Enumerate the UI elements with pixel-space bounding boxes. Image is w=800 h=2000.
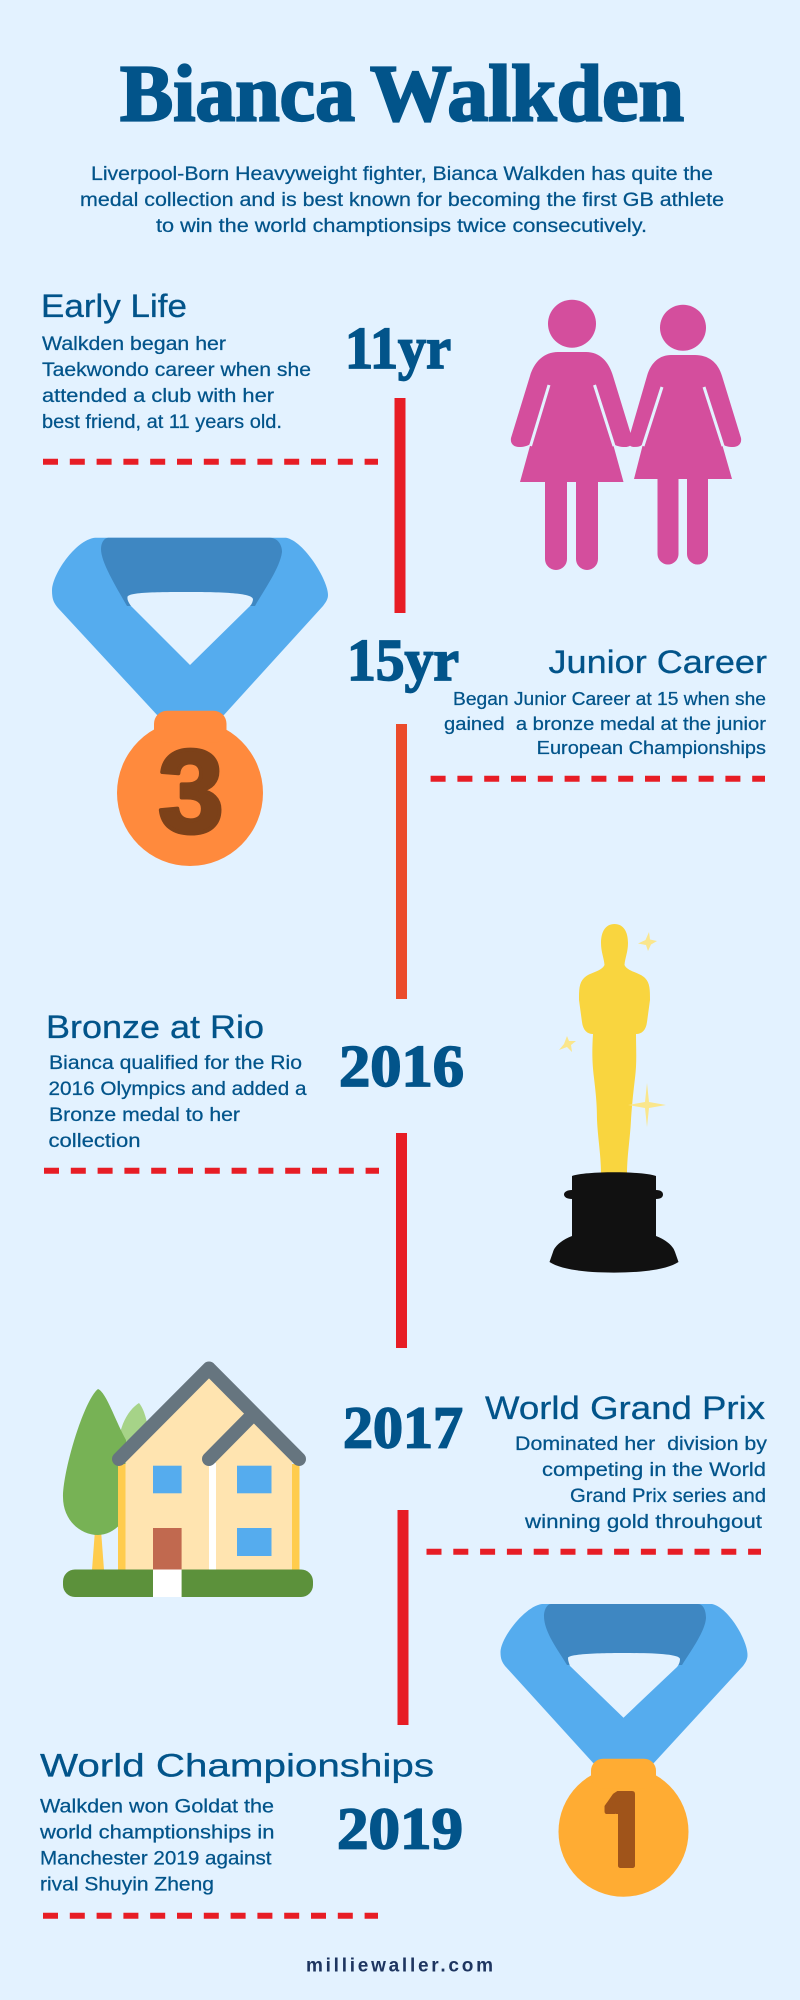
heading: bronze at rio: Bronze at Rio bbox=[46, 1009, 264, 1045]
title: Bianca bbox=[120, 51, 355, 139]
text block: early life: Taekwondo career when she bbox=[42, 359, 311, 381]
intro text block: medal collection and is best known for becoming the first GB athlete bbox=[80, 189, 724, 211]
door bbox=[153, 1528, 182, 1570]
timeline segment 3 bbox=[396, 1133, 407, 1348]
medal disc bbox=[117, 720, 263, 866]
text block: junior career: Began Junior Career at 15 when she bbox=[453, 689, 766, 709]
text block: world grand prix bbox=[515, 1433, 767, 1533]
house walls bbox=[126, 1370, 292, 1570]
text block: early life: attended a club with her bbox=[42, 385, 275, 407]
icon: bronze medal bbox=[52, 538, 328, 866]
panel: world grand prix bbox=[426, 1390, 767, 1552]
medal number: 1 bbox=[594, 1770, 655, 1891]
intro text block: to win the world champtionsips twice consecutively. bbox=[156, 215, 647, 237]
text block: early life: Walkden began her bbox=[42, 333, 227, 355]
panel: junior career bbox=[431, 644, 767, 779]
intro text block: Liverpool-Born Heavyweight fighter, Bianca Walkden has quite the bbox=[91, 163, 713, 185]
text block: world championships: rival Shuyin Zheng bbox=[40, 1874, 214, 1896]
year label: 2017: 2017 bbox=[343, 1395, 463, 1461]
icon: house with trees bbox=[63, 1368, 313, 1597]
text block: bronze at rio: 2016 Olympics and added a bbox=[48, 1078, 307, 1100]
heading: early life: Early Life bbox=[41, 288, 187, 324]
text block: bronze at rio: Bronze medal to her bbox=[49, 1104, 241, 1126]
text block: junior career: gained a bronze medal at the junior bbox=[444, 714, 766, 734]
text block: bronze at rio: collection bbox=[48, 1130, 140, 1152]
title: Walkden bbox=[370, 51, 684, 139]
timeline segment 2 bbox=[396, 724, 407, 999]
roof bbox=[119, 1368, 299, 1459]
icon: gold statue trophy bbox=[550, 924, 678, 1273]
icon: two women holding hands bbox=[511, 300, 741, 559]
statue base bbox=[550, 1172, 678, 1273]
text block: world grand prix: winning gold throuhgout bbox=[524, 1511, 763, 1533]
statue figure bbox=[579, 924, 650, 1175]
medal number: 3 bbox=[158, 726, 224, 858]
text block: world championships: Manchester 2019 against bbox=[40, 1848, 272, 1870]
text block: early life bbox=[42, 333, 311, 433]
icon: gold medal bbox=[500, 1604, 748, 1897]
text block: world grand prix: competing in the World bbox=[542, 1459, 766, 1481]
timeline segment 1 bbox=[394, 398, 406, 613]
ribbon bbox=[52, 538, 328, 716]
text block: world championships: world champtionships in bbox=[39, 1822, 275, 1844]
panel: early life bbox=[41, 288, 378, 462]
year label: 2016: 2016 bbox=[339, 1033, 464, 1099]
trees bbox=[63, 1389, 150, 1570]
heading: junior career: Junior Career bbox=[548, 644, 767, 680]
text block: bronze at rio bbox=[48, 1052, 307, 1152]
timeline segment 4 bbox=[398, 1510, 408, 1725]
panel: world championships bbox=[39, 1748, 434, 1916]
text block: world grand prix: Grand Prix series and bbox=[570, 1485, 766, 1507]
intro text block bbox=[80, 163, 724, 237]
panel: bronze at rio bbox=[44, 1009, 379, 1171]
text block: bronze at rio: Bianca qualified for the Rio bbox=[49, 1052, 302, 1074]
text block: junior career bbox=[444, 689, 766, 758]
ground bbox=[63, 1570, 313, 1597]
sparkles bbox=[559, 932, 666, 1127]
title bbox=[120, 51, 684, 139]
text block: early life: best friend, at 11 years old. bbox=[42, 411, 282, 433]
year label: 2019: 2019 bbox=[337, 1796, 463, 1862]
footer website: milliewaller.com bbox=[306, 1956, 493, 1977]
heading: world championships: World Championships bbox=[40, 1748, 434, 1784]
text block: junior career: European Championships bbox=[537, 738, 766, 758]
heading: world grand prix: World Grand Prix bbox=[485, 1390, 765, 1426]
text block: world grand prix: Dominated her division by bbox=[515, 1433, 767, 1455]
windows bbox=[153, 1466, 272, 1556]
text block: world championships bbox=[39, 1796, 275, 1896]
medal disc bbox=[558, 1767, 688, 1897]
text block: world championships: Walkden won Goldat the bbox=[40, 1796, 274, 1818]
year label: 11yr: 11yr bbox=[345, 315, 451, 381]
ribbon bbox=[500, 1604, 748, 1765]
year label: 15yr: 15yr bbox=[347, 627, 459, 693]
